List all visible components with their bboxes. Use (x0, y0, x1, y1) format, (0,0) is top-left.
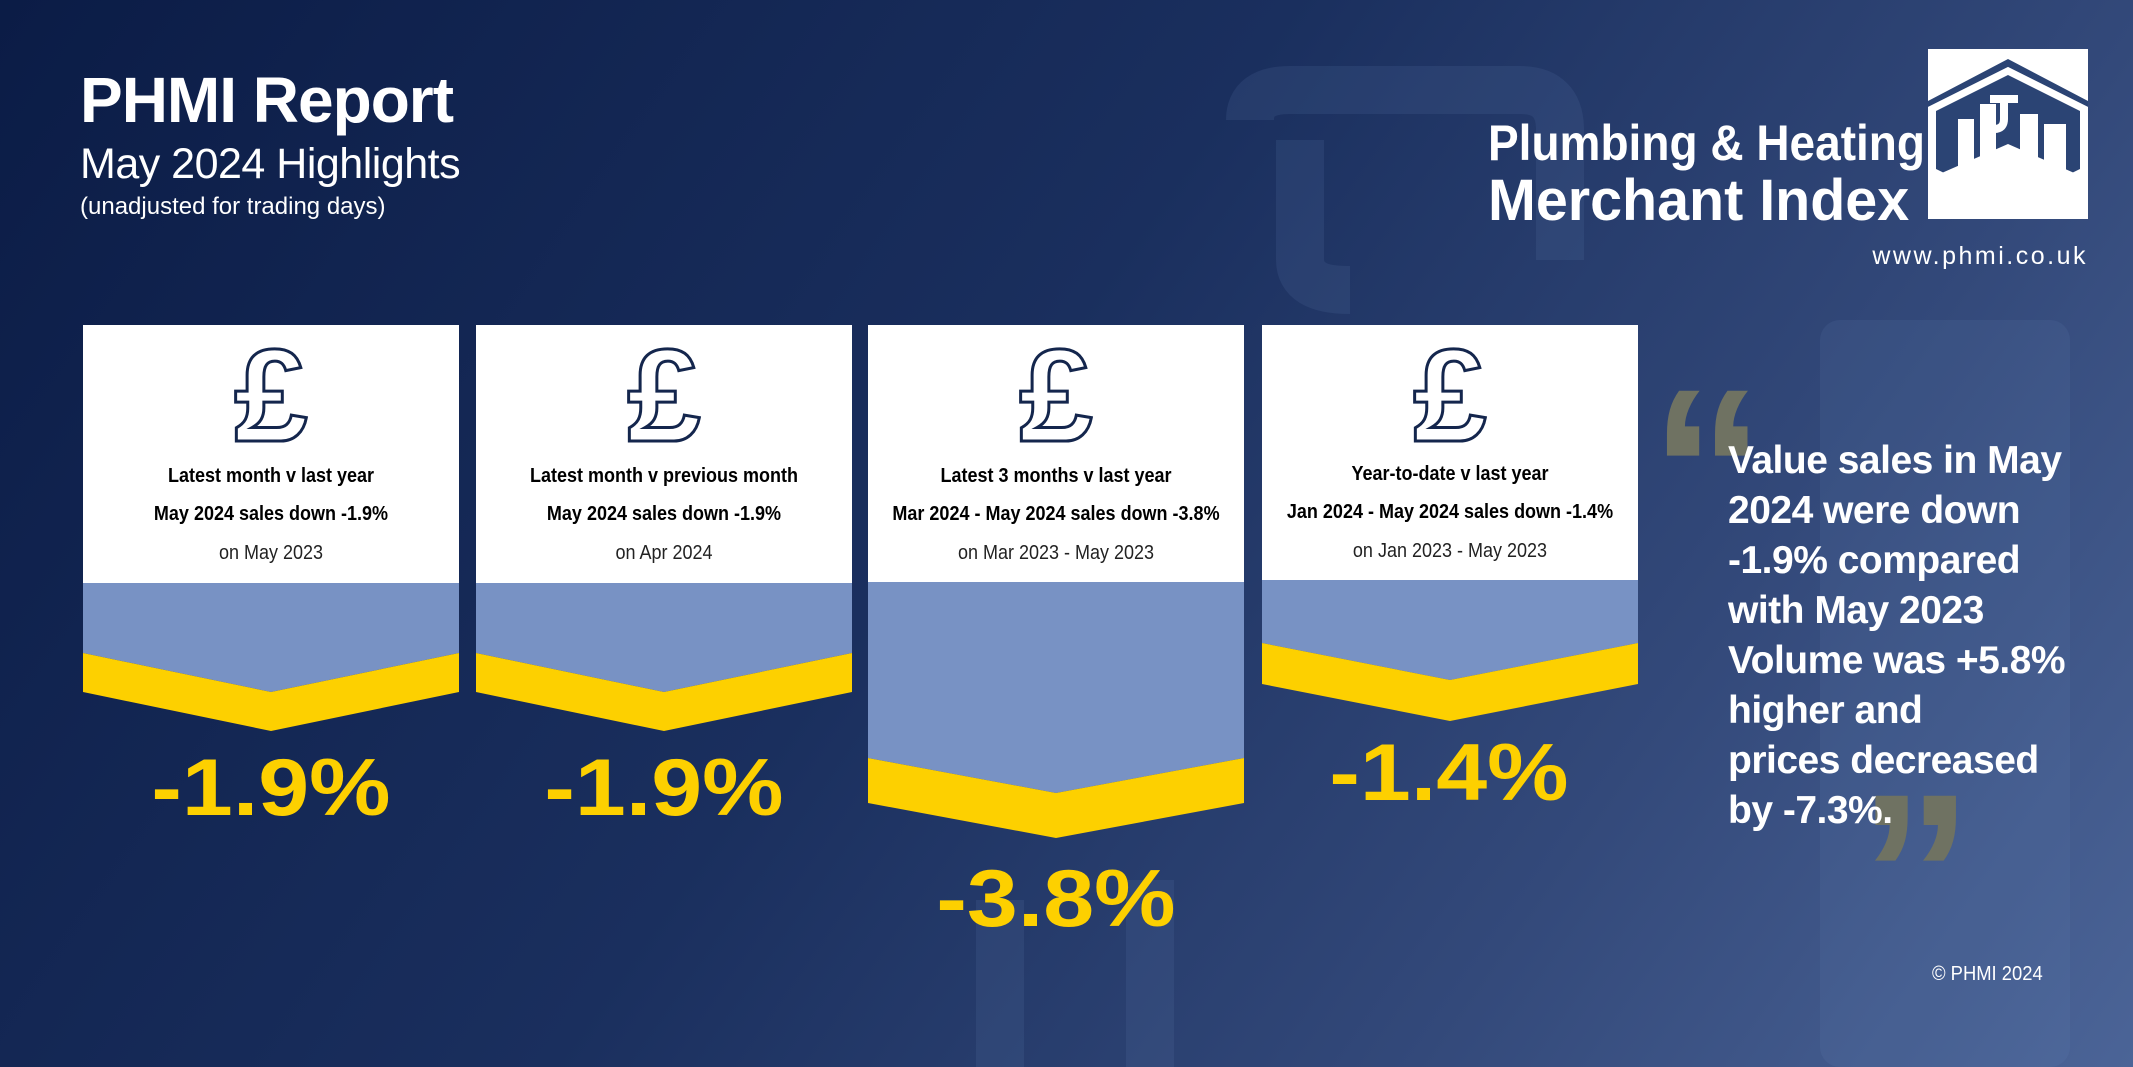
card 3 white panel (868, 325, 1244, 582)
title block: May 2024 Highlights (80, 140, 460, 188)
card 1 (83, 325, 459, 731)
logo text: Plumbing & Heating (1488, 115, 1925, 171)
quote text: -1.9% compared (1728, 539, 2020, 582)
quote text: 2024 were down (1728, 489, 2020, 532)
card 2 white panel: May 2024 sales down -1.9% (547, 503, 781, 525)
card 2 white panel: Latest month v previous month (530, 465, 798, 487)
card 1 white panel: May 2024 sales down -1.9% (154, 503, 388, 525)
card 4 white panel: Jan 2024 - May 2024 sales down -1.4% (1287, 501, 1613, 523)
card 4 (1262, 325, 1638, 721)
card 1 chevron (83, 583, 459, 731)
card 2 (476, 325, 852, 731)
card 3 (868, 325, 1244, 838)
website: www.phmi.co.uk (1872, 242, 2088, 270)
card 2 white panel: on Apr 2024 (615, 542, 713, 564)
logo text (1488, 115, 1925, 233)
quote text: by -7.3%. (1728, 789, 1893, 832)
title block: (unadjusted for trading days) (80, 193, 386, 220)
value 2: -1.9% (544, 743, 784, 833)
quote text: prices decreased (1728, 739, 2039, 782)
copyright: © PHMI 2024 (1932, 963, 2043, 985)
card 3 chevron (868, 582, 1244, 838)
quote text: higher and (1728, 689, 1922, 732)
value 4: -1.4% (1329, 728, 1569, 818)
card 2 chevron (476, 583, 852, 731)
card 4 chevron (1262, 580, 1638, 721)
value 1: -1.9% (151, 743, 391, 833)
card 3 white panel: Mar 2024 - May 2024 sales down -3.8% (892, 503, 1220, 525)
card 4 white panel (1262, 325, 1638, 580)
card 2 white panel (476, 325, 852, 583)
quote text: Value sales in May (1728, 439, 2062, 482)
card 1 white panel: Latest month v last year (168, 465, 374, 487)
logo (1488, 49, 2088, 270)
card 4 white panel: Year-to-date v last year (1351, 463, 1549, 485)
quote text: Volume was +5.8% (1728, 639, 2065, 682)
value 3: -3.8% (936, 854, 1176, 944)
card 1 white panel (83, 325, 459, 583)
quote text (1728, 439, 2065, 832)
title block (80, 64, 460, 220)
quote marks: “ (1650, 341, 1765, 598)
card 4 white panel: on Jan 2023 - May 2023 (1353, 540, 1547, 562)
closing quote: ” (1858, 746, 1973, 1003)
card 1 white panel: on May 2023 (219, 542, 323, 564)
logo text: Merchant Index (1488, 168, 1909, 233)
card 3 white panel: on Mar 2023 - May 2023 (958, 542, 1154, 564)
card 3 white panel: Latest 3 months v last year (940, 465, 1172, 487)
title block: PHMI Report (80, 64, 453, 136)
logo icon: house with tap (1928, 49, 2088, 219)
quote text: with May 2023 (1728, 589, 1984, 632)
